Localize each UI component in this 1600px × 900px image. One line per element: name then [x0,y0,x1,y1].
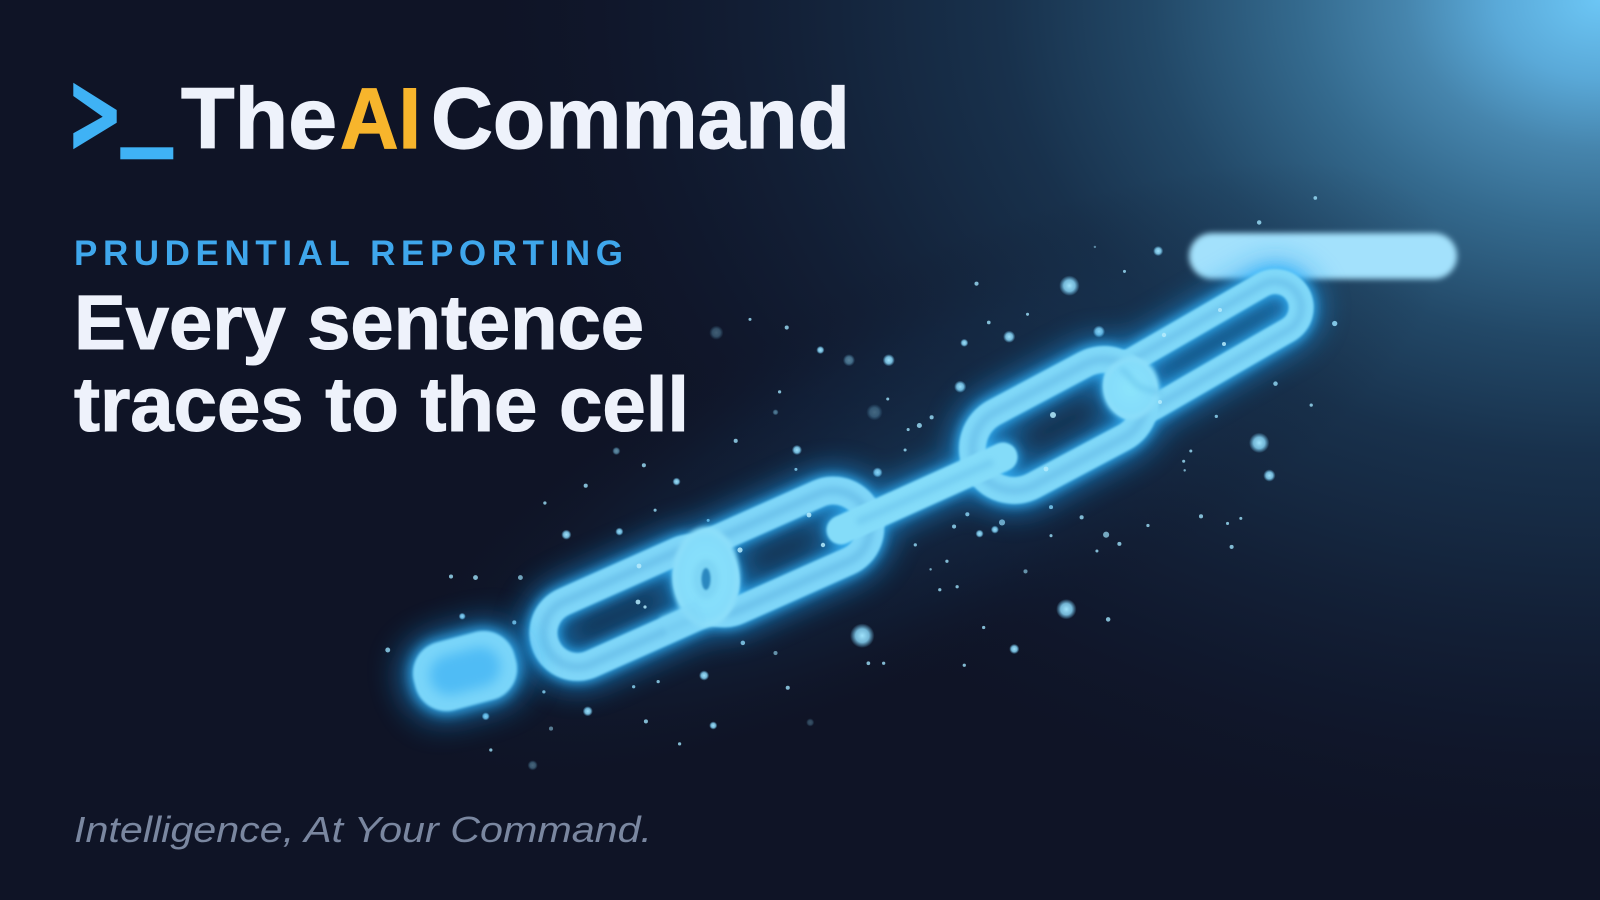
headline [74,280,689,448]
chain link 3 [958,345,1160,505]
start pill [394,614,536,728]
logo wordmark: AI [340,71,421,167]
chain overlap ring 1 and 2 [664,527,740,628]
logo wordmark: Command [431,71,850,167]
chain link 1 [533,537,736,678]
logo icon: terminal prompt [73,83,173,159]
chain overlap knot 3 and 4 [1103,357,1160,419]
chain glow [533,272,1311,678]
chain [533,272,1311,678]
particles over the chain [636,308,1226,609]
headline: Every sentence [74,280,644,366]
connecting rod [841,457,1003,530]
tagline: Intelligence, At Your Command. [74,809,652,850]
kicker: PRUDENTIAL REPORTING [74,234,623,273]
headline: traces to the cell [74,362,689,448]
chain link 2 [675,479,882,625]
particles behind the chain [385,196,1337,770]
blurred end bar [1189,233,1457,279]
logo wordmark [181,71,850,167]
logo wordmark: The [181,71,337,167]
chain link 4 [1106,272,1311,420]
